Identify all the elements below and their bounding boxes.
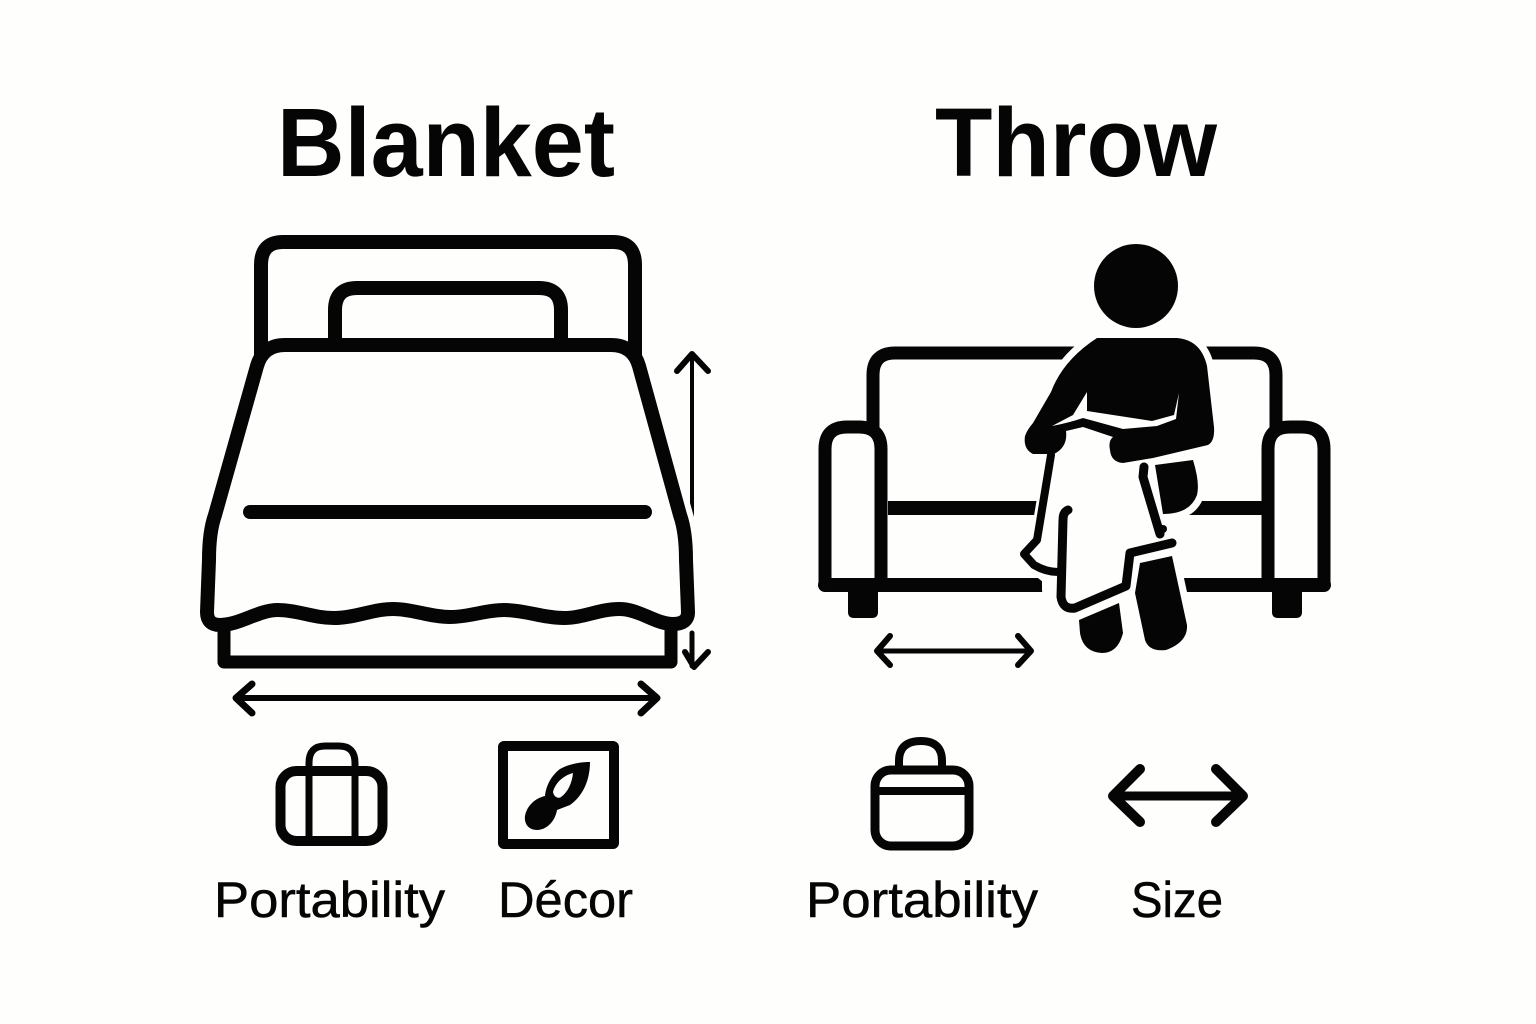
sofa right arm <box>1268 427 1324 585</box>
blanket cover <box>207 345 688 625</box>
sofa seat line <box>888 501 1262 515</box>
icon: picture frame with leaf <box>503 746 614 844</box>
sofa left arm <box>825 427 881 585</box>
towel fold and hem <box>1061 510 1172 608</box>
towel right edge <box>1143 467 1160 534</box>
icon: size arrow <box>1113 769 1243 822</box>
arrow: blanket height <box>677 354 708 667</box>
torso halo <box>1025 338 1214 463</box>
headboard <box>261 242 635 356</box>
sofa bottom rail <box>825 578 1324 592</box>
head <box>1094 244 1178 328</box>
illustration: bed with blanket <box>207 242 688 662</box>
icon: blanket portability suitcase <box>280 746 382 841</box>
arm gap highlights <box>1052 392 1179 429</box>
towel left edge <box>1024 455 1058 572</box>
icon: throw portability bag <box>875 741 969 846</box>
pillow <box>335 288 561 342</box>
blanket fold line <box>250 505 645 519</box>
arrow: throw width <box>877 636 1031 665</box>
lower leg right <box>1135 556 1187 650</box>
illustration: sofa <box>825 353 1324 618</box>
torso and arms <box>1025 338 1214 463</box>
thigh <box>1155 460 1198 514</box>
lower leg left <box>1079 603 1123 653</box>
towel fill <box>1023 432 1172 608</box>
label: Portability (blanket): Portability <box>214 872 445 928</box>
sofa back <box>873 353 1276 430</box>
title: Blanket: Blanket <box>277 88 615 197</box>
bed base <box>224 622 671 662</box>
label: Décor: Décor <box>498 872 633 928</box>
label: Portability (throw): Portability <box>806 872 1038 928</box>
illustration: seated person with throw <box>1023 244 1214 653</box>
title: Throw: Throw <box>935 88 1218 197</box>
arrow: blanket width <box>236 684 657 713</box>
label: Size: Size <box>1131 872 1223 928</box>
sofa legs <box>848 590 878 618</box>
